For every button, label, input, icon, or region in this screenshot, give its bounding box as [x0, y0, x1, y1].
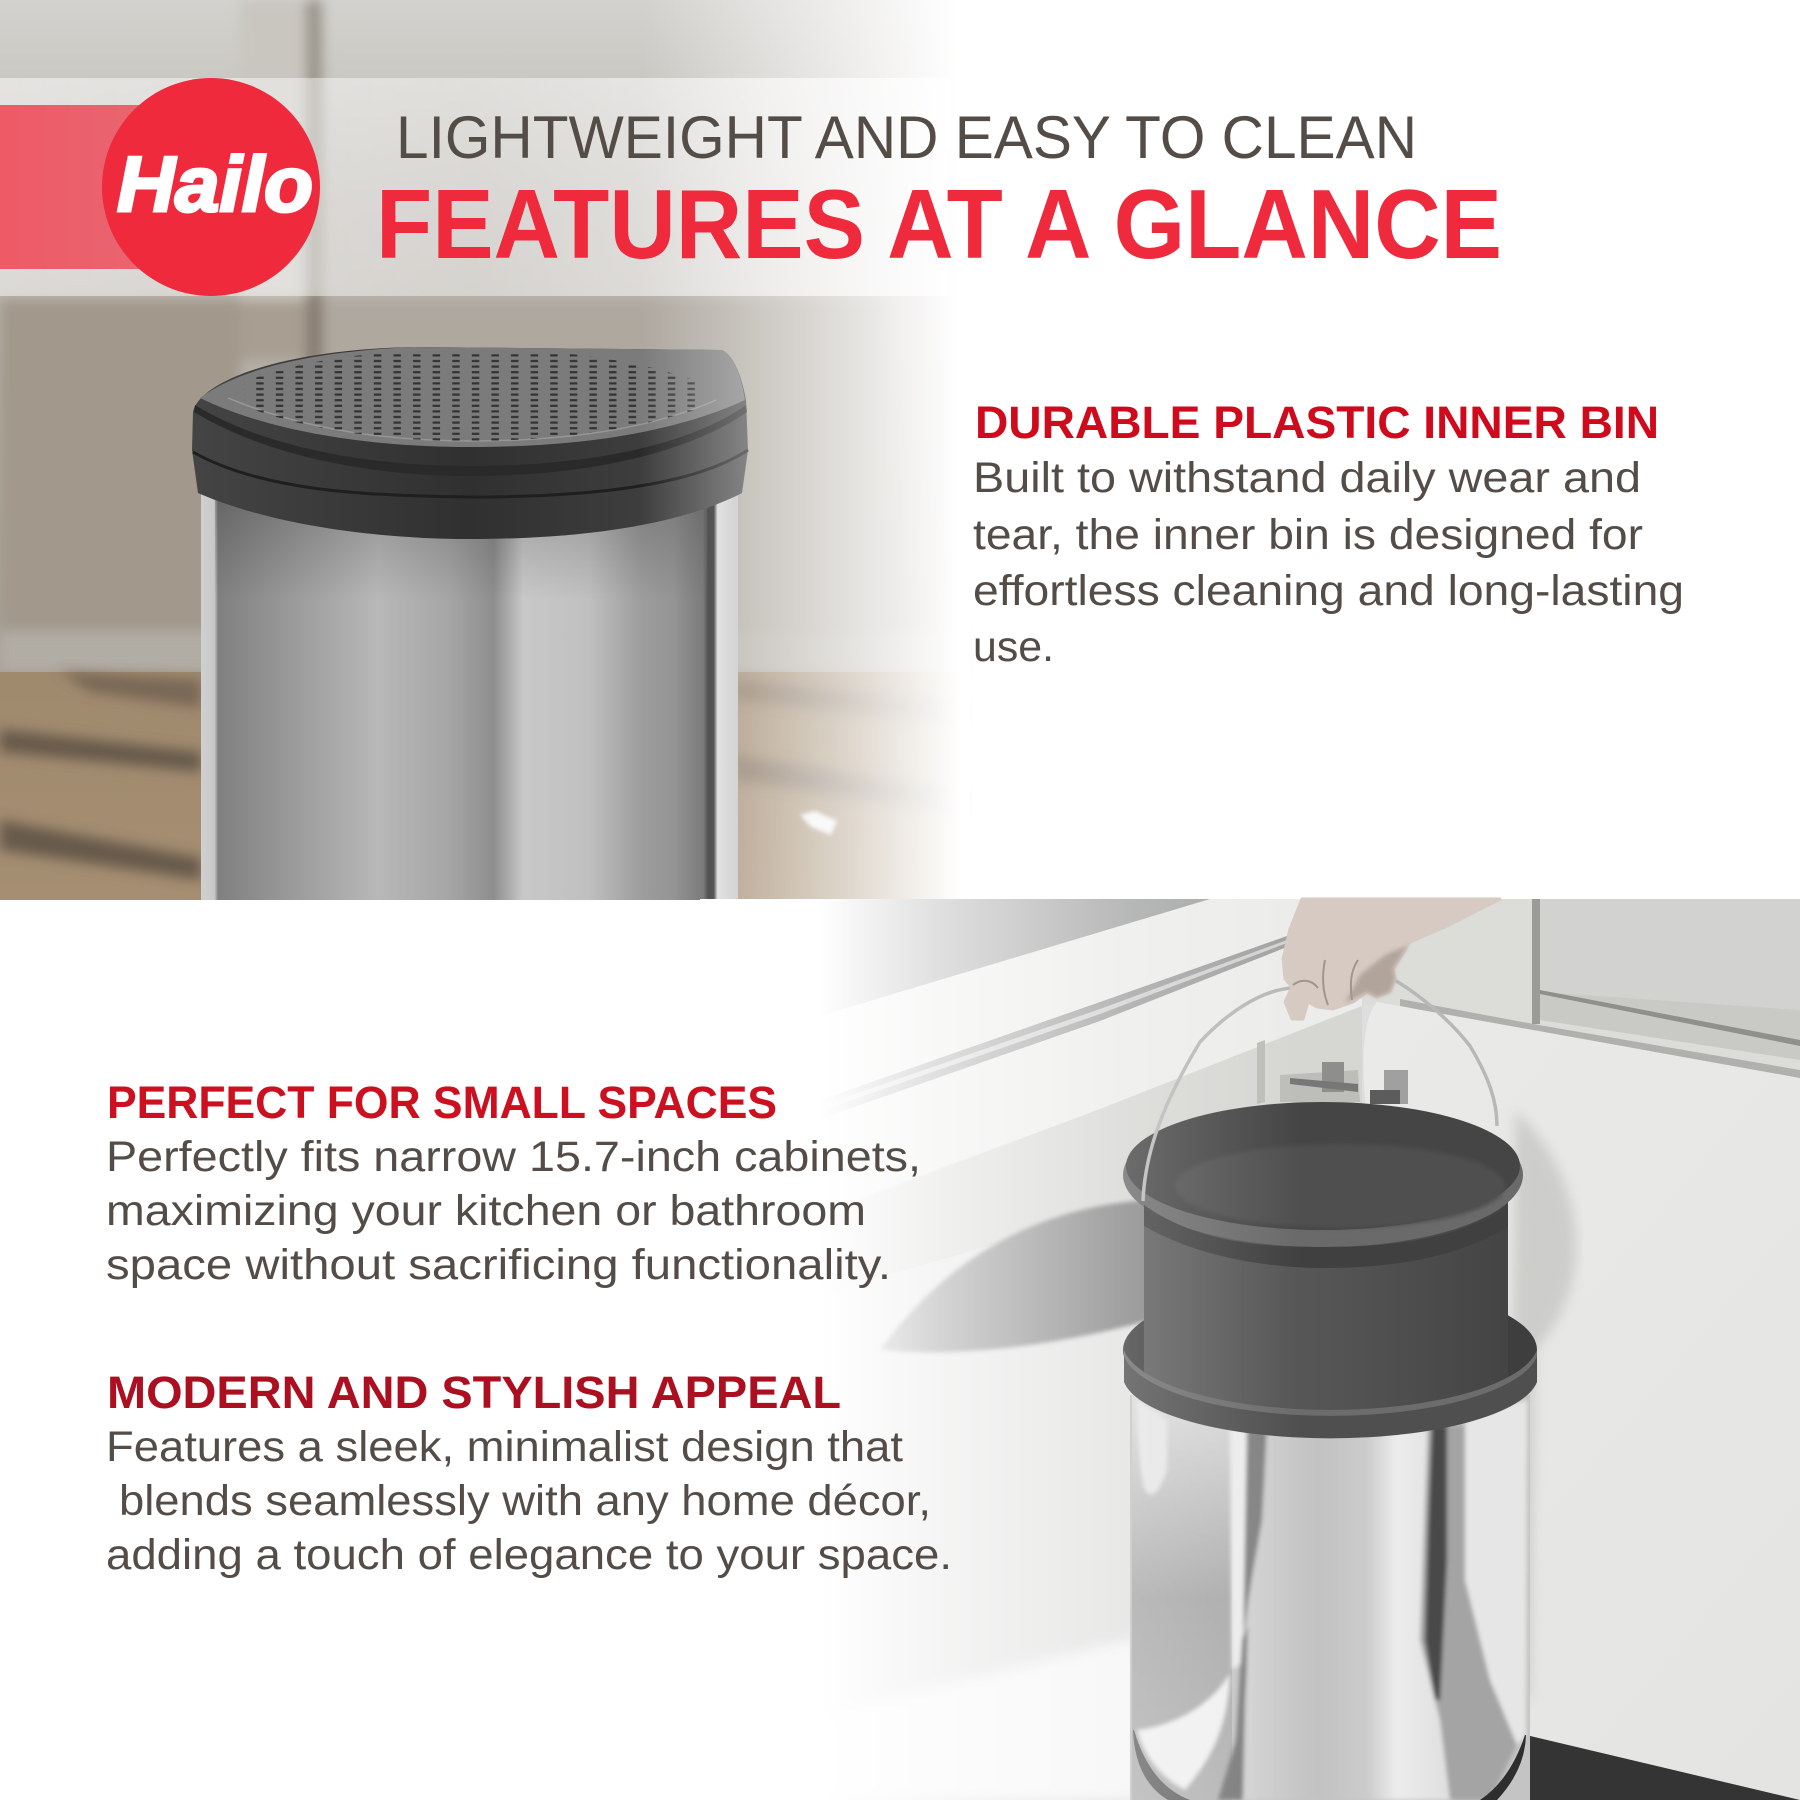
hinge	[1280, 1062, 1408, 1104]
white fade to the right	[640, 0, 970, 900]
panel: feature modern and stylish appeal: MODERN AND STYLISH APPEAL	[107, 1367, 841, 1418]
inner bin top rim	[1123, 1102, 1523, 1268]
logo: Hailo red circle: Hailo	[117, 140, 313, 228]
room wall	[0, 0, 960, 680]
panel: feature durable plastic inner bin: use.	[973, 623, 1054, 671]
wire handle	[1143, 979, 1497, 1201]
panel: feature durable plastic inner bin: effortless cleaning and long-lasting	[973, 567, 1684, 615]
cabinet interior	[800, 1006, 1362, 1300]
panel: feature durable plastic inner bin: tear, the inner bin is designed for	[973, 511, 1643, 559]
door panel	[1130, 1002, 1800, 1800]
panel: feature modern and stylish appeal: Features a sleek, minimalist design that	[106, 1423, 903, 1471]
title: main heading: FEATURES AT A GLANCE	[376, 169, 1502, 279]
cabinet scene backdrop	[800, 899, 1800, 1800]
icon: hand gripping handle	[1283, 899, 1500, 1019]
white fade to the left	[820, 899, 1300, 1800]
dark inner bin wall	[1144, 1190, 1508, 1420]
panel: top photo of stainless bin in room	[0, 0, 970, 900]
title: subtitle line: LIGHTWEIGHT AND EASY TO CLEAN	[396, 104, 1417, 171]
outer ring top surface	[1123, 1282, 1537, 1418]
stainless body	[201, 480, 738, 900]
panel: feature durable plastic inner bin: DURABLE PLASTIC INNER BIN	[975, 397, 1659, 448]
panel: feature modern and stylish appeal: blends seamlessly with any home décor,	[119, 1477, 931, 1525]
wooden floor	[0, 672, 960, 900]
logo: Hailo red circle	[102, 78, 320, 296]
panel: feature perfect for small spaces: space without sacrificing functionality.	[106, 1241, 891, 1289]
panel: feature perfect for small spaces: Perfectly fits narrow 15.7-inch cabinets,	[106, 1133, 921, 1181]
stainless outer bin	[1130, 1395, 1530, 1800]
panel: bottom photo of inner bin lifted from cabinet	[700, 899, 1800, 1800]
panel: feature perfect for small spaces: maximizing your kitchen or bathroom	[106, 1187, 866, 1235]
black lid	[192, 345, 748, 539]
panel: feature perfect for small spaces	[106, 1077, 921, 1289]
shadows	[880, 1200, 1150, 1352]
panel: feature modern and stylish appeal: adding a touch of elegance to your space.	[106, 1531, 952, 1579]
upper right cabinet	[1362, 899, 1800, 1078]
header band	[0, 78, 950, 296]
lid top surface	[200, 347, 745, 447]
panel: feature durable plastic inner bin	[973, 397, 1684, 671]
panel: feature durable plastic inner bin: Built to withstand daily wear and	[973, 454, 1641, 502]
countertop black	[1500, 1735, 1800, 1800]
panel: feature perfect for small spaces: PERFECT FOR SMALL SPACES	[107, 1077, 777, 1128]
panel: feature modern and stylish appeal	[106, 1367, 952, 1579]
red ribbon	[0, 105, 150, 269]
worktop underside and rail	[800, 899, 1362, 1220]
outer black ring	[1124, 1350, 1537, 1438]
